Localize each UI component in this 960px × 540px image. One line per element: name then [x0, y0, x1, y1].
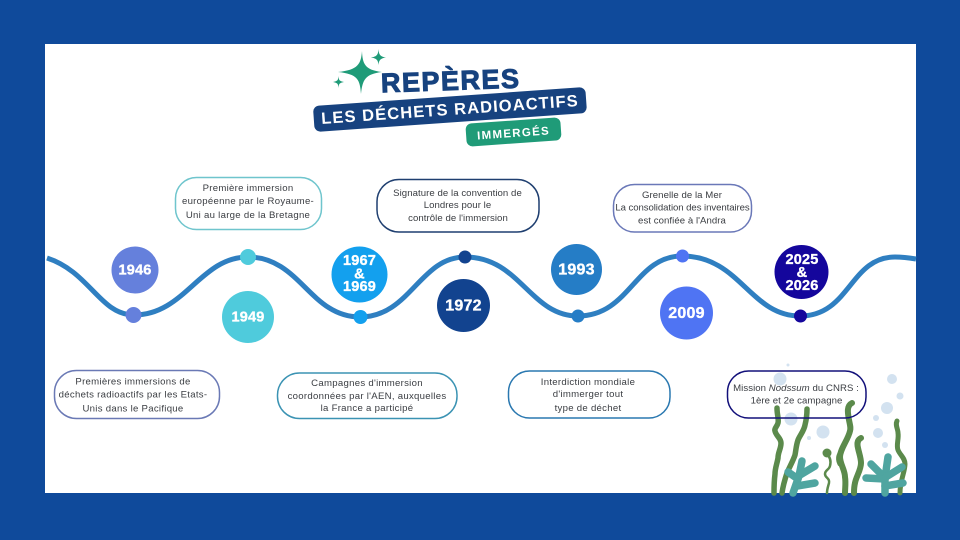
- year badge: 2026: [785, 278, 819, 294]
- seaweed bud: [822, 448, 832, 458]
- description: la France a participé: [321, 403, 413, 414]
- year badge: 1972: [445, 298, 482, 314]
- description: Mission Nodssum du CNRS :: [733, 383, 859, 394]
- marker: [794, 310, 807, 322]
- description: européenne par le Royaume-: [182, 196, 314, 207]
- description: 1ère et 2e campagne: [751, 396, 842, 406]
- description: [176, 178, 322, 230]
- description: [728, 371, 866, 418]
- banner: les déchets radioactifs: LES DÉCHETS RADIOACTIFS: [321, 91, 579, 128]
- description: Signature de la convention de: [393, 188, 522, 199]
- event 1972: [377, 180, 539, 332]
- year badge: [112, 246, 158, 294]
- description: déchets radioactifs par les Etats-: [59, 390, 207, 400]
- description: [508, 371, 670, 418]
- marker: [126, 307, 142, 323]
- heading: REPÈRES: REPÈRES: [380, 63, 521, 98]
- year badge: [660, 286, 713, 340]
- description: La consolidation des inventaires: [615, 202, 750, 214]
- description: [614, 184, 752, 232]
- description: [54, 370, 220, 418]
- description: Londres pour le: [424, 200, 491, 211]
- description: d'immerger tout: [553, 389, 623, 400]
- description: Campagnes d'immersion: [311, 378, 423, 389]
- year badge: [551, 244, 602, 295]
- description: Premières immersions de: [75, 376, 191, 388]
- marker: [354, 310, 368, 324]
- description: coordonnées par l'AEN, auxquelles: [288, 391, 446, 402]
- year badge: [774, 245, 828, 299]
- year badge: 2009: [668, 305, 705, 322]
- year badge: [437, 279, 490, 332]
- year badge: &: [354, 266, 365, 282]
- year badge: [332, 246, 388, 302]
- badge: immergés: [465, 117, 562, 147]
- event 2009: [614, 184, 752, 340]
- event 1949: [176, 178, 322, 343]
- marker: [572, 310, 584, 322]
- description: Unis dans le Pacifique: [82, 404, 184, 414]
- marker: [676, 250, 689, 262]
- title block: [313, 49, 587, 147]
- description: type de déchet: [555, 403, 621, 414]
- description: contrôle de l'immersion: [408, 213, 508, 224]
- description: [278, 373, 457, 418]
- description: Première immersion: [203, 183, 293, 194]
- year badge: [222, 291, 274, 343]
- event 1993: [508, 244, 670, 418]
- description: Interdiction mondiale: [541, 377, 635, 388]
- year badge: 2025: [785, 252, 819, 268]
- timeline wave: [47, 256, 916, 317]
- year badge: 1967: [343, 253, 376, 269]
- illustration: seaweed and bubbles: [774, 364, 905, 493]
- icon: green sparkles: [333, 49, 386, 94]
- marker: [458, 250, 472, 264]
- description: [377, 180, 539, 232]
- year badge: 1993: [558, 262, 595, 278]
- white panel: [45, 44, 916, 493]
- description: Grenelle de la Mer: [642, 190, 723, 201]
- description: est confiée à l'Andra: [638, 216, 727, 226]
- event 1967 and 1969: [278, 246, 457, 418]
- description: Uni au large de la Bretagne: [186, 210, 310, 221]
- year badge: 1969: [343, 279, 376, 295]
- marker: [240, 249, 256, 265]
- year badge: 1949: [231, 310, 265, 326]
- badge: immergés: IMMERGÉS: [477, 124, 550, 142]
- event 2025 and 2026: [728, 245, 866, 418]
- year badge: 1946: [118, 262, 152, 278]
- year badge: &: [797, 265, 808, 281]
- event 1946: [54, 246, 220, 418]
